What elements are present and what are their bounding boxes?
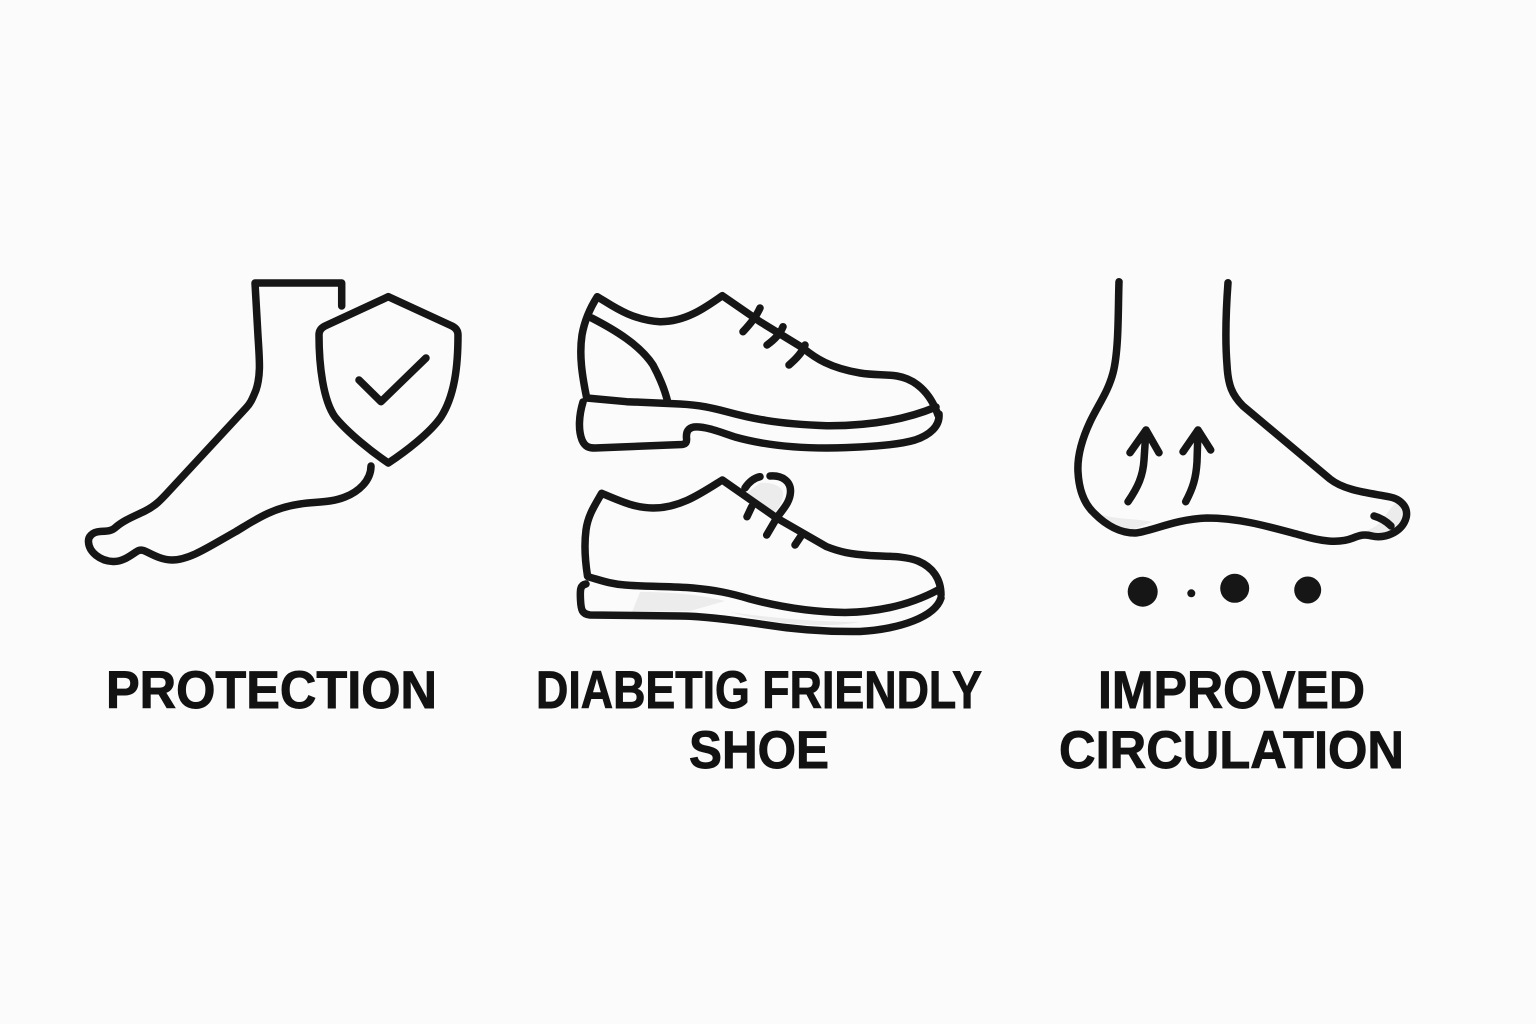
check mark [359,358,426,402]
shoe shading [700,408,925,428]
shield [319,297,458,463]
label: improved circulation: IMPROVED [1098,661,1365,720]
label: protection: PROTECTION [106,661,437,720]
label: diabetic friendly shoe [536,661,982,780]
sole [579,402,939,448]
toe line [1374,516,1391,526]
arrow 2 [1183,430,1211,502]
foot outline [88,283,371,562]
heel shading [1096,512,1152,529]
label: diabetic friendly shoe: SHOE [689,721,829,780]
arrow 1 [1128,430,1159,502]
icon: upper shoe [579,296,939,448]
outsole [580,584,941,632]
laces [745,476,802,545]
heel counter [592,318,668,403]
icon: foot with shield [88,283,458,562]
label: diabetic friendly shoe: DIABETIG FRIENDLY [536,661,982,720]
icon: foot with circulation arrows [1078,282,1407,607]
tongue shading [747,483,783,513]
sole shading [632,592,725,612]
icon: lower shoe [580,476,941,632]
midline [588,577,938,612]
shoe outline [581,296,938,415]
circulation dots [1128,574,1321,607]
upper line [587,398,936,426]
label: improved circulation: CIRCULATION [1059,721,1404,780]
foot outline [1078,282,1407,541]
label: improved circulation [1059,661,1404,780]
laces [743,308,805,365]
toe shading [1356,503,1402,535]
sole shading right [730,612,860,625]
shoe outline [585,480,941,595]
